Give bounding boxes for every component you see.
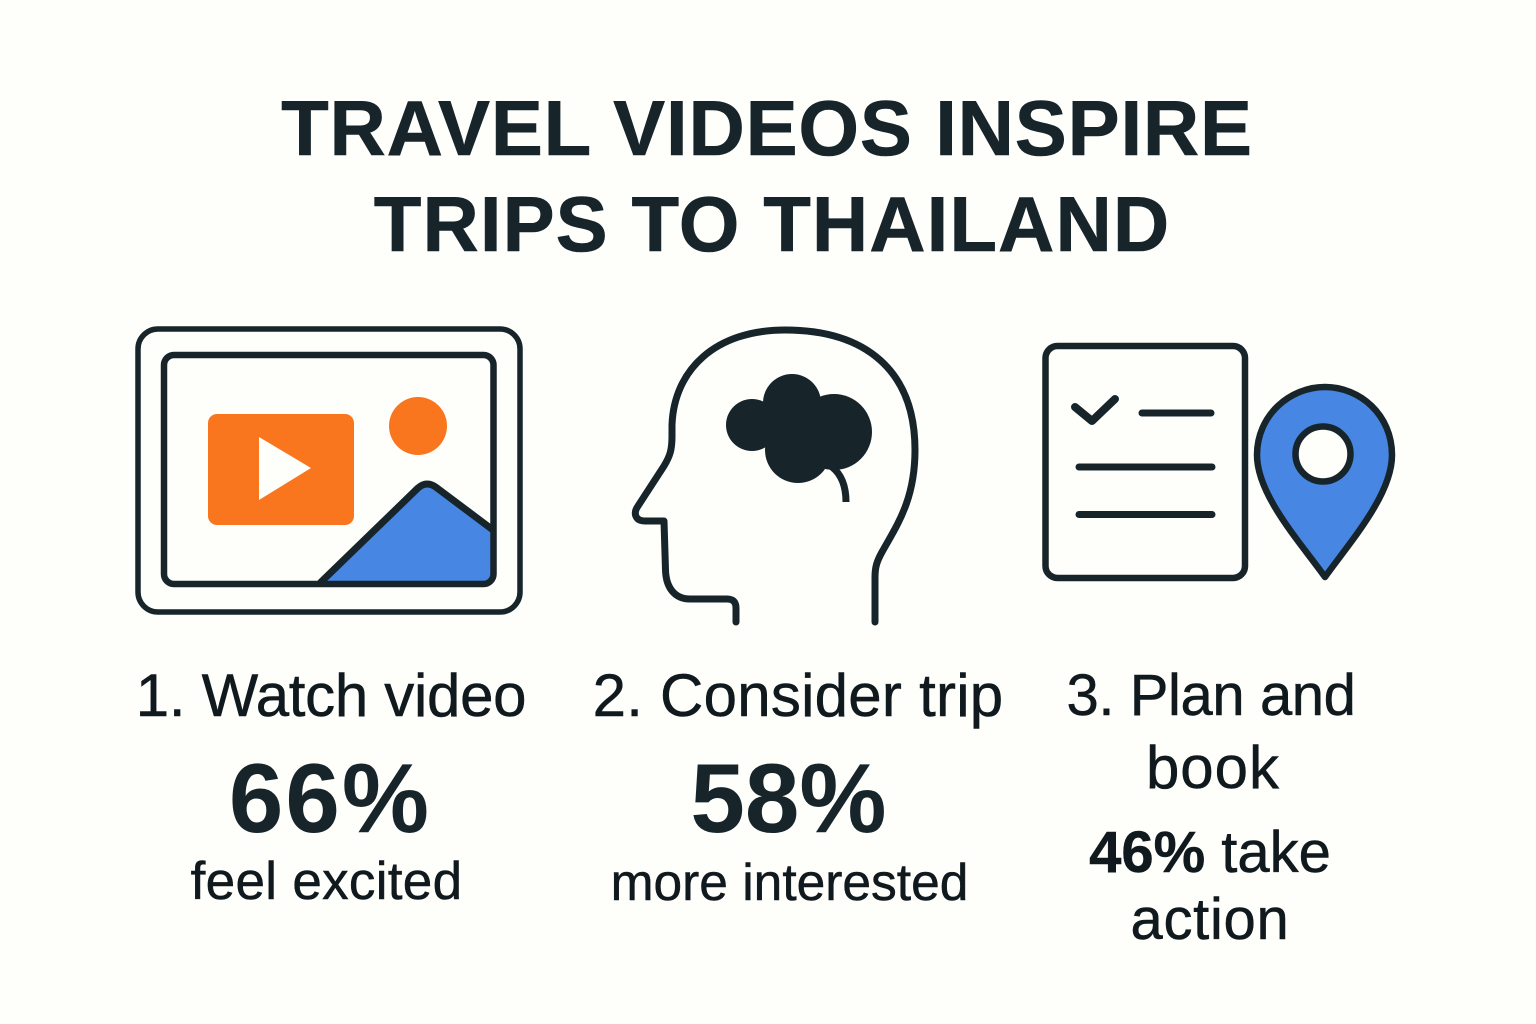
step 1 caption: feel excited [191, 852, 462, 911]
step 1 label: 1. Watch video [136, 662, 526, 729]
step 3 stat: action [1130, 887, 1289, 952]
step 3 stat: 46% take [1089, 820, 1331, 885]
step 3 stat [1089, 820, 1331, 952]
title [281, 84, 1253, 268]
step 3 label: book [1146, 734, 1280, 801]
icon: checklist [1046, 346, 1245, 578]
step 3 label [1066, 663, 1356, 801]
title: TRIPS TO THAILAND [374, 180, 1170, 268]
icon: head with brain [635, 330, 915, 622]
title: TRAVEL VIDEOS INSPIRE [281, 84, 1253, 172]
step 1 number: 66% [229, 743, 431, 853]
step 2 number: 58% [690, 743, 887, 853]
icon: map pin [1257, 387, 1392, 577]
step 3 label: 3. Plan and [1066, 663, 1356, 728]
icon: video screen [138, 329, 520, 612]
step 2 caption: more interested [611, 853, 968, 911]
step 2 label: 2. Consider trip [593, 662, 1003, 729]
